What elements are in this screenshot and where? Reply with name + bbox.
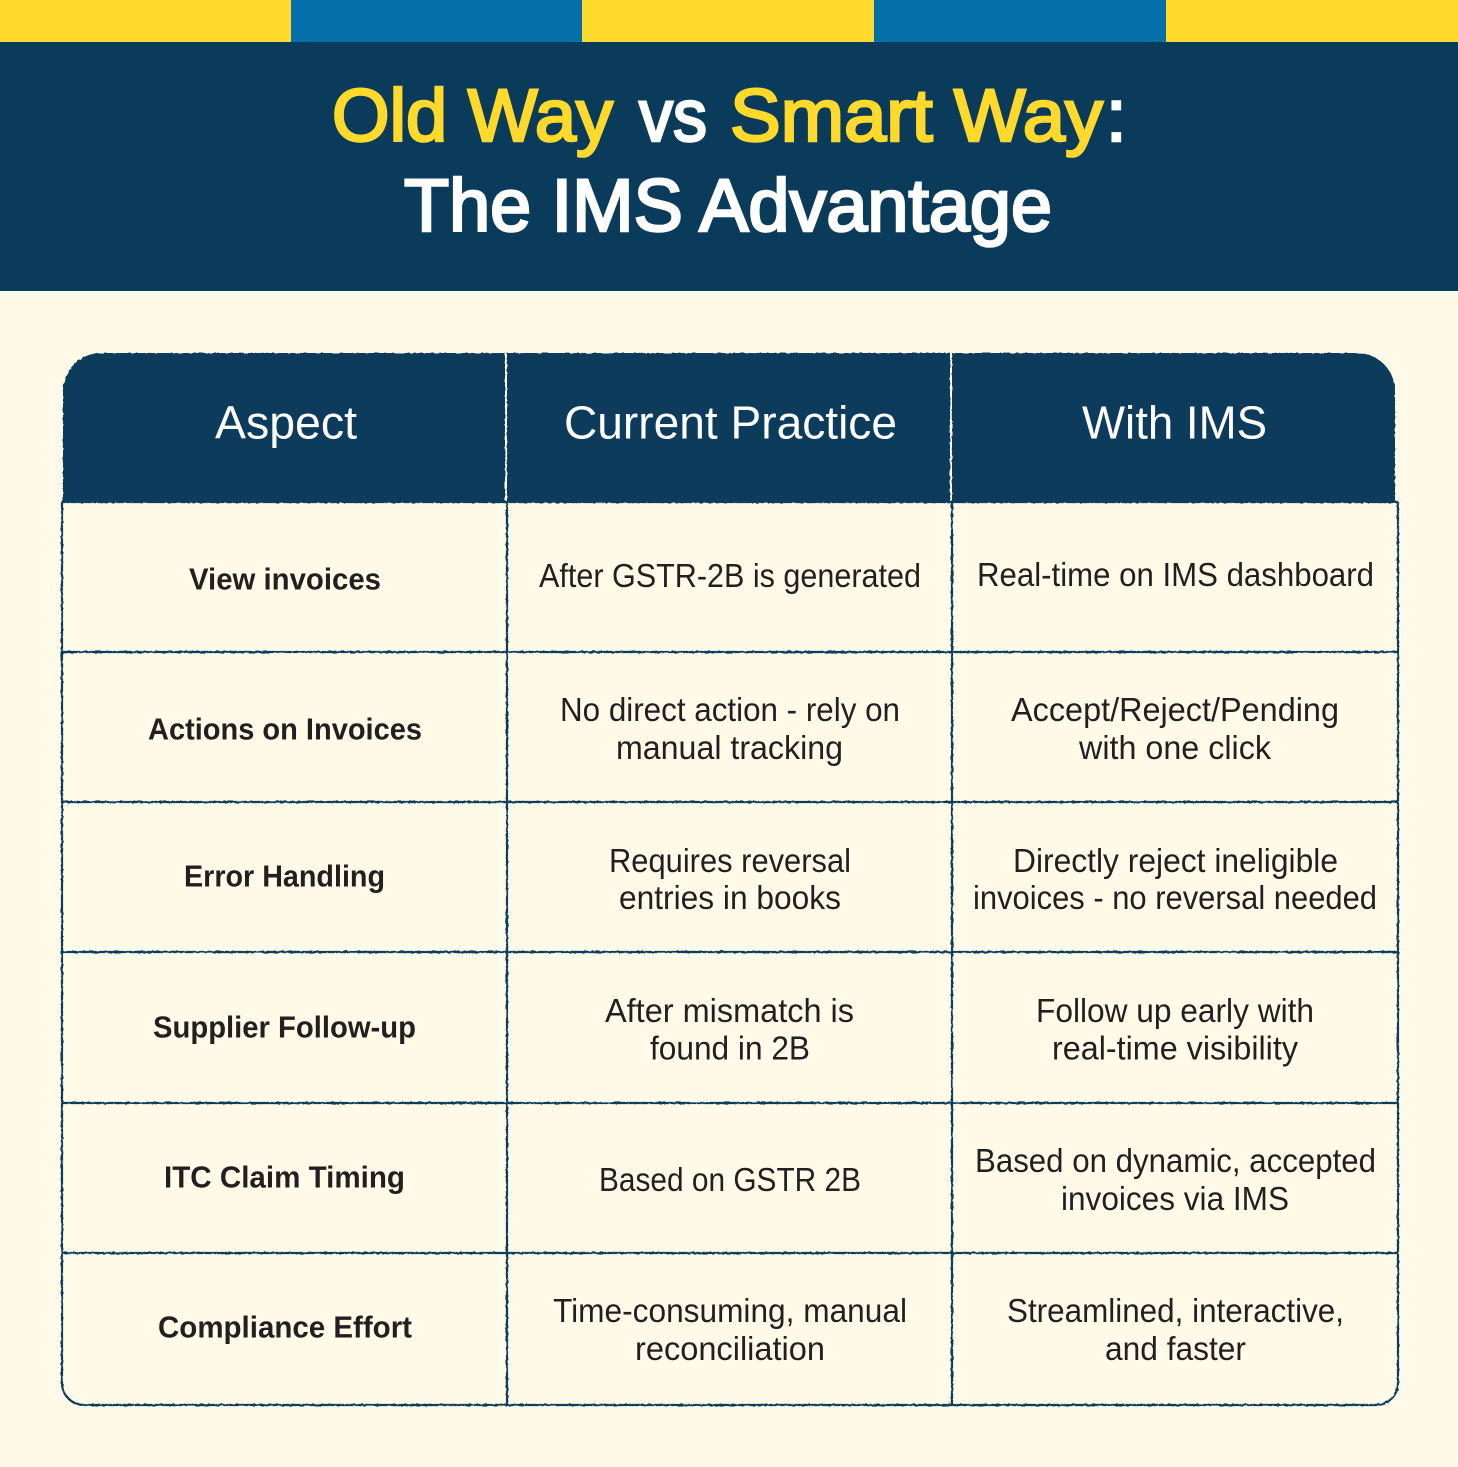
row: Compliance Effort: Time-consuming, manual <box>553 1292 907 1329</box>
title <box>332 74 1127 247</box>
row: Actions on Invoices: No direct action - rely on <box>560 691 900 728</box>
row: Error Handling: Requires reversal <box>609 842 851 879</box>
row: ITC Claim Timing: Based on GSTR 2B <box>599 1161 861 1198</box>
row: Error Handling: invoices - no reversal needed <box>973 879 1377 916</box>
row: Supplier Follow-up <box>153 992 1314 1066</box>
row: View invoices: Real-time on IMS dashboard <box>977 556 1374 593</box>
row: Actions on Invoices: with one click <box>1078 729 1271 766</box>
column heading: With IMS: With IMS <box>1082 396 1267 448</box>
row: Actions on Invoices: Accept/Reject/Pending <box>1011 691 1339 728</box>
table grid <box>62 502 1398 1405</box>
row: Error Handling: Error Handling <box>184 858 385 894</box>
title: vs <box>639 74 707 157</box>
row: Compliance Effort: Streamlined, interactive, <box>1007 1292 1344 1329</box>
row: Supplier Follow-up: After mismatch is <box>605 992 854 1029</box>
comparison table <box>62 353 1398 1405</box>
row: ITC Claim Timing: invoices via IMS <box>1061 1180 1289 1217</box>
column heading: Aspect: Aspect <box>215 396 357 448</box>
title: : <box>1106 74 1127 157</box>
row: Actions on Invoices <box>148 691 1339 766</box>
row: ITC Claim Timing: Based on dynamic, accepted <box>975 1142 1376 1179</box>
title: The IMS Advantage <box>404 164 1052 247</box>
title banner <box>0 42 1458 291</box>
title: Smart Way <box>730 74 1103 157</box>
row: Actions on Invoices: manual tracking <box>616 729 843 766</box>
row: View invoices: After GSTR-2B is generated <box>539 557 921 594</box>
row: View invoices <box>189 556 1374 596</box>
row: Supplier Follow-up: real-time visibility <box>1052 1030 1298 1066</box>
column heading: Current Practice: Current Practice <box>564 396 897 448</box>
table header band <box>63 353 1395 502</box>
row: Compliance Effort <box>158 1292 1344 1367</box>
row: Error Handling: entries in books <box>619 879 841 916</box>
row: ITC Claim Timing: ITC Claim Timing <box>164 1160 405 1194</box>
row: Supplier Follow-up: Follow up early with <box>1036 992 1314 1029</box>
row: View invoices: View invoices <box>189 562 381 596</box>
row: Compliance Effort: Compliance Effort <box>158 1310 412 1344</box>
row: Supplier Follow-up: found in 2B <box>650 1030 810 1066</box>
row: Compliance Effort: reconciliation <box>635 1330 825 1367</box>
row: Compliance Effort: and faster <box>1105 1330 1246 1367</box>
row: Error Handling <box>184 842 1377 916</box>
row: ITC Claim Timing <box>164 1142 1376 1217</box>
colour stripe <box>0 0 1458 43</box>
row: Supplier Follow-up: Supplier Follow-up <box>153 1010 416 1044</box>
row: Error Handling: Directly reject ineligible <box>1013 842 1338 879</box>
row: Actions on Invoices: Actions on Invoices <box>148 712 422 746</box>
title: Old Way <box>332 74 613 157</box>
